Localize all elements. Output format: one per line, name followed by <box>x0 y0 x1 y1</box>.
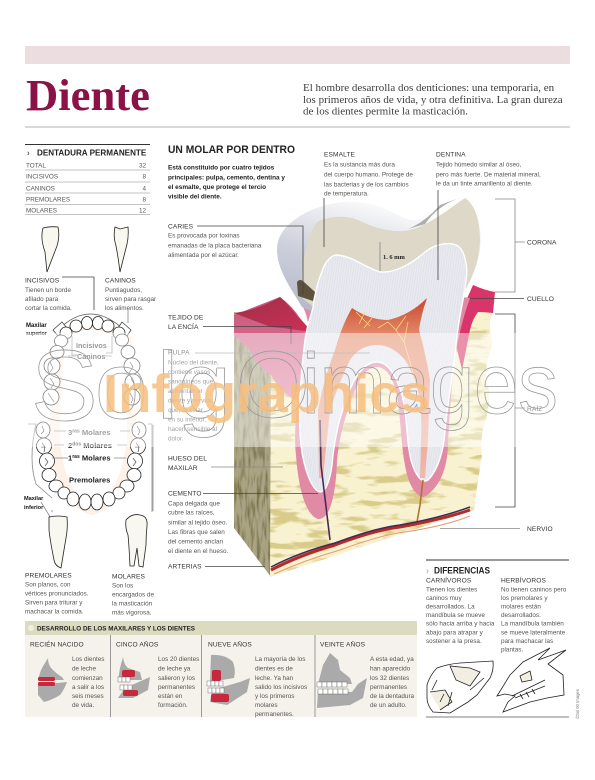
stage: veinte anos: de un adulto. <box>370 702 407 709</box>
text: caninos: los alimentos. <box>105 305 144 312</box>
label: corona <box>495 199 557 292</box>
table rows: MOLARES <box>26 208 57 214</box>
pointer: incisivos <box>62 277 94 310</box>
caries <box>297 280 315 301</box>
label: tejido de la encia <box>168 314 291 344</box>
stage: recien nacido: seis meses <box>72 693 104 700</box>
stage: nueve anos: salido los incisivos <box>255 684 307 691</box>
label: cuello: CUELLO <box>527 296 554 303</box>
stage: veinte anos <box>317 640 415 709</box>
label: pulpa: que, al estar <box>168 407 203 414</box>
table rows: 12 <box>139 208 146 214</box>
label: cemento: Las fibras que salen <box>168 529 225 536</box>
label: pulpa: en su interior, <box>168 416 206 424</box>
stage: recien nacido <box>30 640 104 709</box>
label: tejido de la encia: LA ENCÍA <box>168 322 199 331</box>
label: esmalte: ESMALTE <box>324 152 355 158</box>
enamel cut face <box>302 198 480 320</box>
icon: molar tooth <box>126 515 147 567</box>
label: hueso del maxilar: HUESO DEL <box>168 456 207 462</box>
label: pulpa: dolor. <box>168 436 184 442</box>
label: dentina: le da un tinte amarillento al diente. <box>436 180 533 188</box>
label: cemento: similar al tejido óseo. <box>168 520 227 526</box>
label: caries: alimentada por el azúcar. <box>168 252 239 259</box>
label: raiz: RAÍZ <box>527 404 542 413</box>
label: esmalte <box>324 152 413 247</box>
stage: cinco anos: están en <box>158 693 183 700</box>
icon: herbivore skull <box>497 648 566 712</box>
label: maxilar superior: superior <box>26 331 47 337</box>
label: 1.6 mm <box>380 242 406 271</box>
label: 1ras molares: Molares <box>80 454 111 462</box>
text: incisivos: INCISIVOS <box>25 278 60 284</box>
label: cemento: cubre las raíces, <box>168 510 215 516</box>
watermark band <box>0 333 595 447</box>
label: 2dos molares: dos <box>72 442 81 448</box>
stage: nueve anos: leche. Ya han <box>255 675 294 682</box>
label: arterias <box>168 564 265 570</box>
stage: nueve anos <box>207 640 307 718</box>
stage: cinco anos: formación. <box>158 702 188 709</box>
stage: cinco anos: salieron y los <box>158 675 195 682</box>
heading: diferencias: › <box>426 566 429 576</box>
label: esmalte: del cuerpo humano. Protege de <box>324 172 413 178</box>
intro text: de los dientes permite la masticación. <box>303 106 468 118</box>
text: carnivoros: Tienen los dientes <box>426 586 477 594</box>
label: dentina: DENTINA <box>436 152 466 158</box>
text: molares: encargados de <box>112 592 154 598</box>
label: hueso del maxilar <box>168 456 283 472</box>
label: maxilar inferior: Maxilar <box>24 496 44 502</box>
label: raiz <box>495 314 542 507</box>
watermark: images outline: l <box>157 333 178 439</box>
label: cemento: Capa delgada que <box>168 500 220 508</box>
header rule <box>25 126 570 128</box>
label: dentina: Tejido húmedo similar al óseo, <box>436 162 522 168</box>
icon: premolar tooth <box>49 516 67 568</box>
stage: veinte anos: VEINTE AÑOS <box>320 640 366 648</box>
label: pulpa: PULPA <box>168 350 190 356</box>
text: incisivos: afilado para <box>25 296 59 303</box>
text: molares: MOLARES <box>112 574 145 580</box>
text: carnivoros: sostener a la presa. <box>426 638 482 645</box>
table rows: TOTAL <box>26 162 46 170</box>
heading: desarrollo: DESARROLLO DE LOS MAXILARES Y LOS DIENTES <box>37 626 195 632</box>
dentine <box>300 244 467 492</box>
credit: ©Sol 90 Images <box>575 689 580 719</box>
text: molares: la masticación <box>112 600 153 608</box>
diagram: dental arches <box>24 310 153 520</box>
main nerve <box>271 507 470 574</box>
gum left <box>234 297 314 402</box>
text: incisivos: Tienen un borde <box>25 287 71 294</box>
enamel shading <box>408 197 462 229</box>
label: 1ras molares: 1 <box>68 454 72 462</box>
text: carnivoros: abajo para atrapar y <box>426 630 484 636</box>
label: arterias: ARTERIAS <box>168 564 202 570</box>
panel: diferencias <box>426 560 580 719</box>
header band <box>25 46 570 64</box>
label: caries: Es provocada por toxinas <box>168 232 240 240</box>
bone block front <box>268 295 498 580</box>
text: molares: Son los <box>112 582 133 590</box>
label: incisivos: Incisivos <box>76 341 107 350</box>
label: pulpa: contiene vasos <box>168 369 210 376</box>
table rows: 4 <box>142 186 146 192</box>
watermark: images outline: g <box>178 333 231 439</box>
pulp vessels <box>356 312 418 392</box>
label: nervio <box>440 526 553 533</box>
text: herbivoros: desarrollados. <box>501 612 541 619</box>
label: cemento: el diente en el hueso. <box>168 548 229 555</box>
text: premolares: Sirven para triturar y <box>25 600 83 606</box>
stage: veinte anos: los 32 dientes <box>370 675 409 682</box>
text: premolares: machacar la comida. <box>25 608 84 616</box>
text: herbivoros: No tienen caninos pero <box>501 586 567 594</box>
table rows: 8 <box>142 196 146 204</box>
label: esmalte: las bacterias y de los cambios <box>324 182 409 188</box>
text: molar intro: el esmalte, que protege el tercio <box>168 184 266 191</box>
label: pulpa: sanguíneos que <box>168 378 214 386</box>
label: esmalte: de temperatura. <box>324 190 369 198</box>
heading: un molar por dentro: UN MOLAR POR DENTRO <box>168 144 295 156</box>
label: pulpa: diente y nervios <box>168 398 212 404</box>
label: caninos: Caninos <box>77 352 105 361</box>
heading: diferencias: DIFERENCIAS <box>434 566 490 576</box>
stage: nueve anos: molares <box>255 702 278 709</box>
text: herbivoros: plantas. <box>501 646 523 654</box>
watermark: images outline: S <box>31 330 98 442</box>
stage: nueve anos: La mayoría de los <box>255 656 305 663</box>
watermark: images outline: images <box>302 337 558 432</box>
watermark: images outline: O <box>236 332 310 438</box>
stage: recien nacido: a salir a los <box>72 684 104 691</box>
text: herbivoros: HERBÍVOROS <box>501 576 546 584</box>
label: nervio: NERVIO <box>527 526 553 533</box>
watermark: images outline <box>31 330 558 442</box>
stage: cinco anos: Los 20 dientes <box>158 656 199 663</box>
label: 2dos molares: Molares <box>81 441 112 450</box>
label: pulpa: hacen sensible al <box>168 426 217 433</box>
stage: nueve anos: dientes es de <box>255 666 293 672</box>
stage: recien nacido: Los dientes <box>72 656 104 663</box>
table rows <box>25 162 150 214</box>
stage: cinco anos: de leche ya <box>158 666 191 672</box>
title: Diente <box>26 71 150 120</box>
enamel outer <box>277 198 481 320</box>
table rows: CANINOS <box>26 186 55 192</box>
panel: desarrollo de los maxilares <box>25 621 417 718</box>
text: molares: más vigorosa. <box>112 610 152 616</box>
label: corona: CORONA <box>527 240 557 246</box>
stage: cinco anos <box>116 640 199 709</box>
label: tejido de la encia: TEJIDO DE <box>168 314 204 322</box>
label: 2dos molares: 2 <box>68 441 72 450</box>
heading: dentadura permanente: › <box>27 148 30 158</box>
table rows: INCISIVOS <box>26 174 58 180</box>
intro text: los primeros años de vida, y otra definitiva. La gran dureza <box>303 94 563 106</box>
label: pulpa: alimentan el <box>168 388 202 395</box>
label: 1ras molares: ras <box>72 454 80 460</box>
label: cemento: CEMENTO <box>168 490 202 498</box>
stage: nueve anos: NUEVE AÑOS <box>208 640 252 648</box>
stage: recien nacido: de vida. <box>72 702 94 709</box>
label: esmalte: Es la sustancia más dura <box>324 162 395 168</box>
watermark: images outline: o <box>95 333 148 439</box>
label: caries: CARIES <box>168 224 194 230</box>
text: herbivoros: los premolares y <box>501 595 548 602</box>
stage: recien nacido: de leche <box>72 666 96 672</box>
label: caries <box>168 224 303 295</box>
text: molar intro: visible del diente. <box>168 194 222 200</box>
stage: cinco anos: permanentes <box>158 684 195 691</box>
gum right <box>456 285 495 370</box>
text: herbivoros: molares están <box>501 604 541 610</box>
icon: incisor tooth <box>42 227 59 272</box>
heading: dentadura permanente: DENTADURA PERMANENTE <box>37 148 147 158</box>
stage: veinte anos: de la dentadura <box>370 693 415 700</box>
text: caninos: Puntiagudos, <box>105 287 142 294</box>
text: premolares: vértices pronunciados. <box>25 590 89 598</box>
label: hueso del maxilar: MAXILAR <box>168 465 198 472</box>
stage: veinte anos: A esta edad, ya <box>370 656 414 663</box>
label: 1.6 mm: 1. 6 mm <box>383 254 406 261</box>
label: 3ras molares: Molares <box>80 428 111 437</box>
icon: canine tooth <box>114 227 128 272</box>
text: caninos: sirven para rasgar <box>105 296 156 303</box>
label: maxilar superior: Maxilar <box>26 323 47 329</box>
label: cuello <box>470 296 554 303</box>
text: caninos: CANINOS <box>105 278 136 284</box>
label: cemento: del cemento anclan <box>168 538 223 546</box>
intro text: El hombre desarrolla dos denticiones: una temporaria, en <box>303 82 555 94</box>
label: caries: emanadas de la placa bacteriana <box>168 242 262 250</box>
stage: veinte anos: permanentes <box>370 684 407 691</box>
bone block side <box>234 305 271 580</box>
label: 3ras molares: 3 <box>68 428 72 437</box>
text: carnivoros: CARNÍVOROS <box>426 576 472 584</box>
table rows: PREMOLARES <box>26 196 70 204</box>
watermark: infographics: Infographics <box>103 364 430 424</box>
icon: carnivore skull <box>427 661 493 713</box>
text: herbivoros: se mueve lateralmente <box>501 630 566 636</box>
label: maxilar inferior: inferior <box>24 505 44 511</box>
text: carnivoros: sólo hacia arriba y hacia <box>426 620 495 628</box>
stage: veinte anos: han aparecido <box>370 666 411 672</box>
table rows: 32 <box>139 162 146 170</box>
stage: nueve anos: permanentes. <box>255 711 294 718</box>
label: cemento <box>168 490 318 555</box>
stage: recien nacido: comienzan <box>72 675 103 682</box>
panel: dentadura permanente <box>25 144 150 214</box>
text: herbivoros: La mandíbula también <box>501 620 564 628</box>
text: incisivos: cortar la comida. <box>25 305 72 312</box>
pulp <box>318 298 430 478</box>
text: molar intro: principales: pulpa, cemento, dentina y <box>168 174 285 182</box>
label: dentina <box>436 152 541 280</box>
label: 3ras molares: ras <box>72 428 80 434</box>
illustration: molar cross-section <box>234 197 498 580</box>
table rows: 8 <box>142 174 146 180</box>
text: premolares: PREMOLARES <box>25 572 72 580</box>
label: premolares: Premolares <box>69 476 110 484</box>
root outer layer <box>295 297 470 519</box>
stage: nueve anos: y los primeros <box>255 693 294 700</box>
text: herbivoros: para machacar las <box>501 638 553 645</box>
label: pulpa <box>168 350 370 442</box>
stage: cinco anos: CINCO AÑOS <box>116 640 159 648</box>
label: pulpa: Núcleo del diente, <box>168 360 219 366</box>
text: carnivoros: mandíbula se mueve <box>426 612 485 619</box>
label: dentina: pero más fuerte. De material mineral, <box>436 172 541 178</box>
text: carnivoros: caninos muy <box>426 595 462 602</box>
nerve root vessels <box>320 420 330 540</box>
text: carnivoros: desarrollados. La <box>426 604 475 610</box>
text: premolares: Son planos, con <box>25 582 71 588</box>
text: molar intro: Está constituido por cuatro tejidos <box>168 164 275 172</box>
stage: recien nacido: RECIÉN NACIDO <box>30 640 84 648</box>
